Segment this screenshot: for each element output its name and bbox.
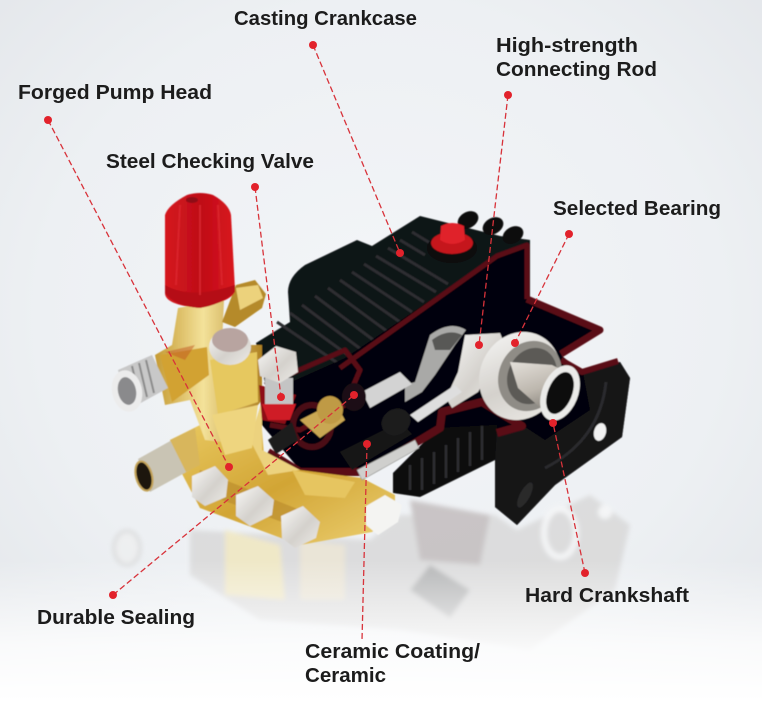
- label: High-strength Connecting Rod: High-strength: [496, 34, 638, 57]
- crankcase: rear block: [256, 216, 530, 405]
- crankcase: lower fins: [393, 425, 497, 497]
- crankshaft: [510, 359, 588, 427]
- hex bolts: [192, 466, 402, 548]
- crankshaft bearing: [465, 318, 575, 434]
- callout lines: [48, 45, 585, 640]
- callout dots: [44, 41, 589, 599]
- seal and ceramic plunger: [268, 383, 415, 470]
- label: Ceramic Coating / Ceramic: [305, 640, 480, 687]
- checking valve: [258, 346, 298, 424]
- crankcase: top fins: [277, 232, 448, 368]
- label: High-strength Connecting Rod: Connecting Rod: [496, 58, 657, 81]
- crankcase: rounded ribs on top: [454, 208, 527, 247]
- bypass fitting: [222, 280, 266, 327]
- reflection of the pump: [114, 495, 630, 650]
- label: Casting Crankcase: Casting Crankcase: [234, 7, 417, 30]
- oil cap: [427, 223, 477, 263]
- label: Ceramic Coating / Ceramic: Ceramic: [305, 664, 386, 687]
- piston rods: [362, 372, 462, 422]
- pump illustration: [108, 193, 630, 548]
- outlet thread fitting: [108, 355, 168, 415]
- label: Steel Checking Valve: Steel Checking Valve: [106, 150, 314, 173]
- label: Ceramic Coating / Ceramic: Ceramic Coating/: [305, 640, 480, 663]
- red pressure cap: [165, 193, 235, 308]
- label: Selected Bearing: Selected Bearing: [553, 197, 721, 220]
- brass manifold: [170, 400, 395, 545]
- label: High-strength Connecting Rod: [496, 34, 657, 81]
- crank end flange: [495, 362, 630, 525]
- brass valve body: [155, 300, 262, 455]
- crankcase: cutaway interior: [262, 245, 630, 525]
- top silver plug: [209, 328, 251, 365]
- label: Forged Pump Head: Forged Pump Head: [18, 81, 212, 104]
- crankcase: dark red cut edges: [265, 245, 618, 472]
- label: Durable Sealing: Durable Sealing: [37, 606, 195, 629]
- label: Hard Crankshaft: Hard Crankshaft: [525, 584, 689, 607]
- connecting rod: [405, 326, 505, 408]
- small screw rod: [357, 440, 419, 480]
- inlet pipe: [132, 428, 200, 493]
